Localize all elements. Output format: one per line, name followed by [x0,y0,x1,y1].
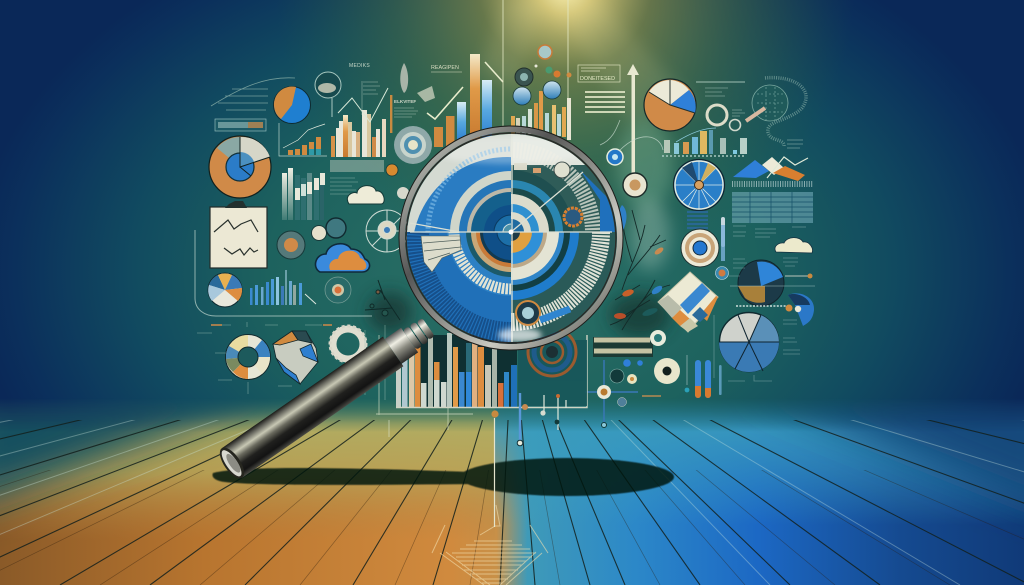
panel: top left charts [209,63,432,220]
curved connector [195,230,372,316]
glass highlights [430,136,590,164]
branches left of lens [365,280,400,320]
floor chevron pattern [432,505,548,585]
icon: rock circle [315,72,341,117]
orange ball [386,164,398,176]
label: ELKVITEF: ELKVITEF [394,99,416,104]
text box [578,65,620,82]
orange tape [390,95,392,133]
panel: lower right [585,205,815,428]
lens quadrant: top left [407,134,511,232]
clipboard [210,201,267,268]
quarter pie [788,293,814,326]
panel: top centre [417,45,625,147]
magnifying glass [215,120,626,482]
small dot circle [716,266,728,280]
text lines [705,88,803,148]
dial behind lens [518,328,587,406]
white pill [721,217,725,247]
pie chart [208,273,242,307]
small ring [730,120,740,130]
leaf pair [417,86,435,102]
vertical blue line [721,225,725,261]
dashed leader [736,304,792,312]
bars [434,54,492,147]
radial disc [394,126,432,164]
lens [407,134,615,342]
tree [610,208,670,330]
icon: blue and orange cloud [315,244,370,272]
small blue circle [607,149,623,165]
lens quadrant: top right [511,134,615,232]
leader with dot [785,274,812,278]
crosshair [410,165,612,342]
top light lines [503,0,568,132]
arrow [627,64,639,174]
eye [654,358,680,384]
curve with text lines [211,78,295,110]
label: REAGIPEN: REAGIPEN [431,65,459,71]
panel: top right [600,64,813,247]
floor drop line [494,418,496,527]
text block strip [330,160,384,172]
orbs [513,45,561,105]
compass wheel [674,160,724,210]
pie chart [644,79,696,131]
lens rim [399,126,623,350]
donut chart [209,136,271,198]
white ball [397,187,409,199]
icon: small pie [274,86,310,124]
lens quadrant: bottom left [407,232,511,342]
leaf icon [400,63,408,93]
segmented donut [226,334,270,380]
blue bar chart [250,270,302,305]
small grid [687,212,708,228]
column chart [662,128,747,156]
orange tape [642,395,661,397]
stripes panel [593,337,653,357]
small bars [511,72,572,140]
text lines [330,178,358,194]
floor plank lines [0,420,1024,585]
handle [215,312,439,482]
dial ring [623,173,647,197]
rule [696,81,745,83]
white cloud [347,186,384,204]
tree leaves [614,205,665,319]
lens quadrant: bottom right [511,232,615,342]
large pie [719,312,779,372]
dark pie [730,260,815,306]
dark token [326,218,346,238]
text lines [714,258,800,381]
white cloud [775,238,813,253]
scope icon [746,85,788,121]
ring [707,105,727,125]
list [585,92,625,112]
axes [396,335,587,408]
faint labels [197,322,385,400]
text lines [733,226,806,237]
small blue balls [610,359,643,406]
polygon blob [273,331,318,384]
progress strip [215,119,266,131]
target icon [325,277,351,303]
panel: middle left [195,201,408,320]
text lines [362,81,418,117]
curve [600,120,663,150]
pills [695,360,722,398]
pin lines [491,393,566,446]
gear [330,326,366,362]
tall bar chart [331,88,388,157]
small bar chart [279,123,327,156]
magnifier shadow [212,458,674,496]
mountain chart [733,157,808,181]
node with line [585,360,638,428]
gray bar chart [282,168,325,220]
backing [415,335,517,407]
target [681,229,719,267]
isometric card [658,272,718,332]
eye ring [650,330,666,346]
text box: DONEITESED [580,76,615,82]
panel: bottom centre bars [376,328,587,527]
dial icon [277,231,305,259]
small arrow [305,294,316,304]
wooden floor [0,402,1024,585]
check mark line [427,87,463,119]
bars [396,333,517,407]
wheel icon [366,210,408,252]
cyan pin [685,355,689,392]
serpentine [765,78,806,146]
panel: lower left [197,322,385,400]
heading: MEDIKS: MEDIKS [349,63,370,69]
data table [732,184,813,223]
white token [312,226,326,240]
